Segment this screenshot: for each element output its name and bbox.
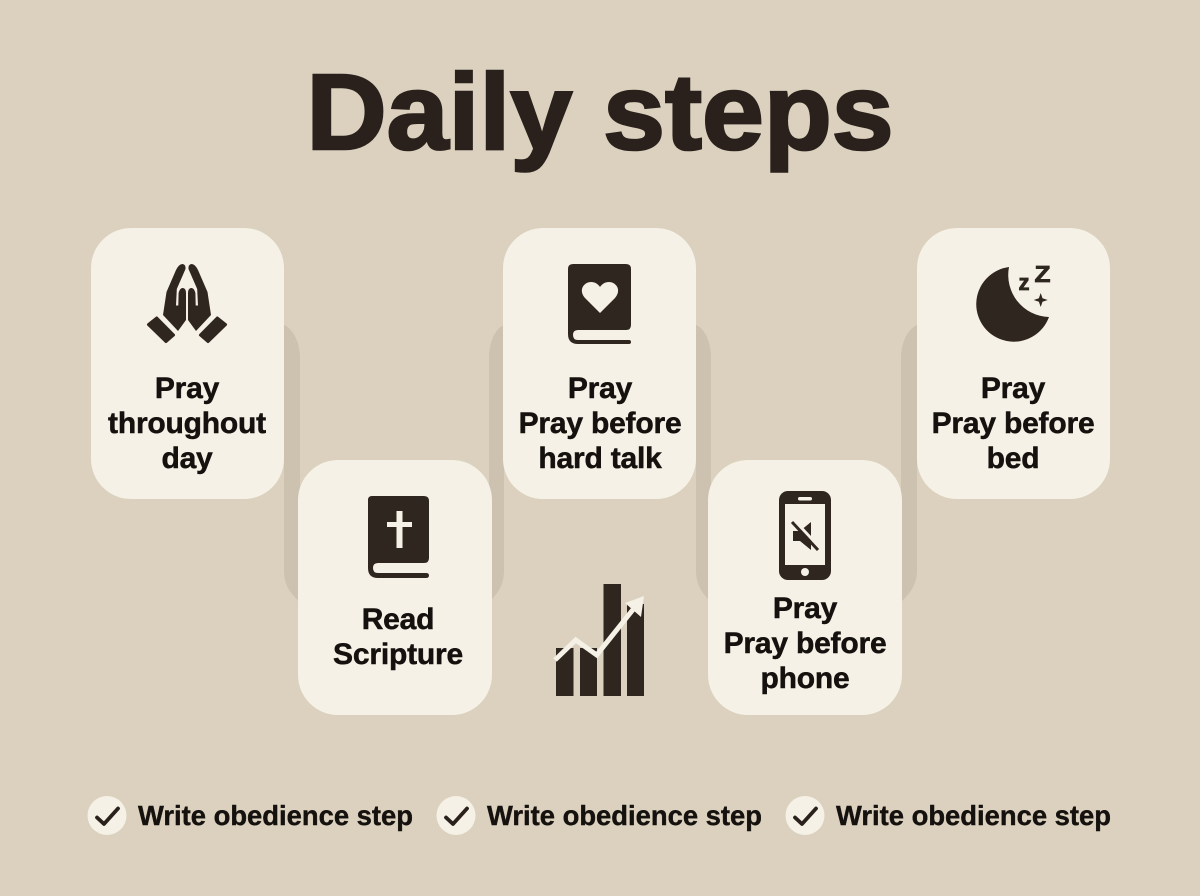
checklist item 2	[436, 796, 762, 835]
icon: book with heart	[568, 264, 631, 344]
panel: read scripture	[298, 460, 492, 715]
label: read scripture: Read	[362, 603, 434, 636]
label: pray throughout day: day	[161, 442, 213, 475]
panel: pray before phone	[708, 460, 902, 715]
label: pray before hard talk: Pray before	[519, 407, 681, 440]
panel: pray before hard talk	[503, 228, 696, 499]
title: Daily steps	[306, 52, 894, 173]
checklist item 2: Write obedience step	[487, 800, 762, 831]
icon: rising bar chart	[555, 584, 644, 696]
checklist item 3: Write obedience step	[836, 800, 1111, 831]
label: pray before phone: Pray	[773, 592, 838, 625]
checklist item 1	[88, 796, 413, 835]
label: pray before hard talk: hard talk	[538, 442, 662, 475]
label: pray before bed: bed	[987, 442, 1039, 475]
icon: muted phone	[779, 491, 831, 580]
label: pray throughout day: Pray	[155, 372, 220, 405]
connector: card 2 to card 3	[489, 325, 504, 602]
checklist item 3	[786, 796, 1111, 835]
label: pray before phone: Pray before	[724, 627, 886, 660]
icon: moon with sleep symbols	[976, 261, 1050, 342]
panel: pray throughout day	[91, 228, 284, 499]
panel: pray before bed	[917, 228, 1110, 499]
label: pray before bed: Pray before	[932, 407, 1094, 440]
icon: moon with sleep symbols: z	[1018, 270, 1030, 295]
connector: card 3 to card 4	[696, 325, 711, 602]
connector: card 1 to card 2	[284, 325, 300, 602]
icon: moon with sleep symbols: Z	[1034, 261, 1050, 287]
checklist item 1: Write obedience step	[138, 800, 413, 831]
label: pray throughout day: throughout	[108, 407, 266, 440]
label: read scripture: Scripture	[333, 638, 463, 671]
label: pray before hard talk: Pray	[568, 372, 633, 405]
label: pray before bed: Pray	[981, 372, 1046, 405]
connector: card 4 to card 5	[901, 325, 917, 602]
icon: bible with cross	[368, 496, 429, 578]
label: pray before phone: phone	[760, 662, 850, 695]
icon: praying hands	[148, 264, 226, 342]
